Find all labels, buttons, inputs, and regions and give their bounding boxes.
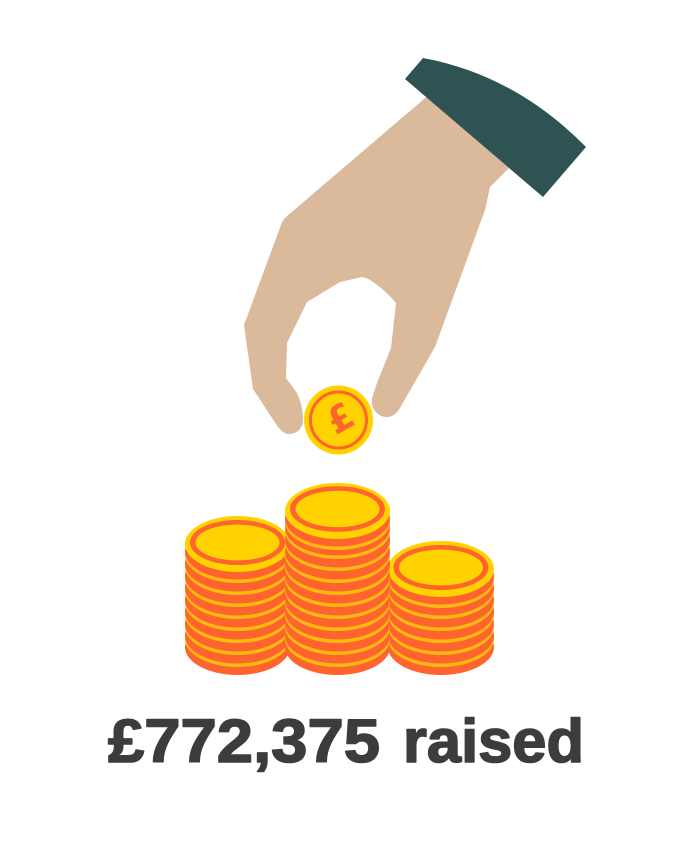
headline: amount raised: [108, 707, 584, 775]
icon: sleeve cuff: [405, 58, 586, 197]
headline: amount raised: £772,375: [108, 707, 380, 775]
right coin stack: [388, 541, 494, 675]
coin stacks: [185, 483, 494, 675]
icon: pound coin: [304, 386, 373, 454]
middle coin stack: [285, 483, 390, 675]
icon: hand: [244, 94, 512, 434]
hand holding coin: [244, 58, 586, 454]
left coin stack: [185, 516, 290, 675]
headline: amount raised: raised: [403, 707, 584, 775]
pound sign: £: [320, 395, 362, 443]
